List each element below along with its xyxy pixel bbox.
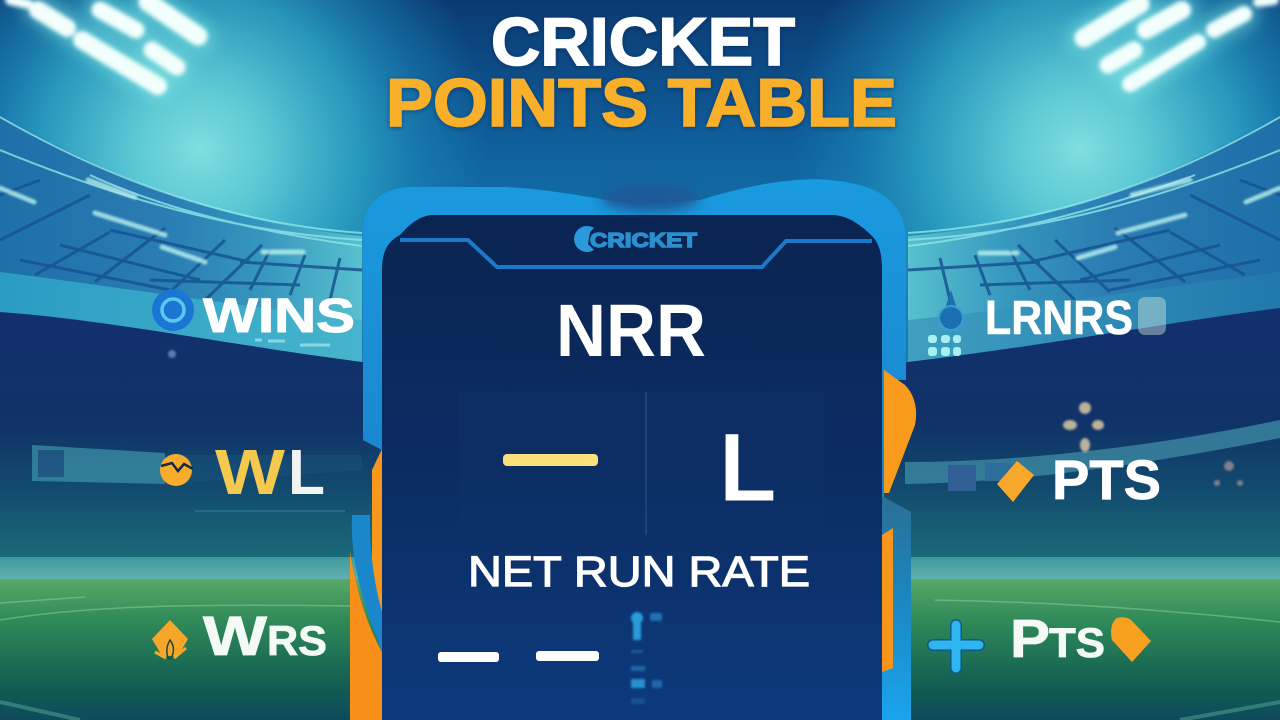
label: lrnrs: [928, 290, 1166, 356]
right scoreboard strip: [905, 420, 1280, 491]
green pitch: [0, 579, 1280, 720]
left floodlight: [10, 0, 200, 86]
dash left: [438, 652, 499, 662]
label: pts: [997, 448, 1161, 511]
letter L: L: [719, 417, 775, 519]
brand logo: [574, 226, 697, 252]
label: lrnrs: LRNRS: [985, 292, 1133, 345]
label: pts with plus: TS: [1049, 619, 1105, 666]
phone top shadow: [600, 184, 700, 212]
dash right: [536, 651, 599, 661]
left upper stand: [0, 115, 362, 362]
seat lights: [255, 340, 330, 345]
orange accent right lower: [882, 528, 893, 672]
small data marks: [631, 612, 662, 704]
label: wrs: [152, 604, 327, 667]
pitch boundary band: [0, 557, 1280, 580]
label: wrs: W: [203, 604, 267, 667]
label: wrs: RS: [267, 617, 327, 664]
orange accent left upper: [372, 449, 382, 612]
label: wl: W: [215, 436, 286, 508]
title line: points table: POINTS TABLE: [386, 65, 897, 141]
icon: blue plus: [933, 625, 979, 668]
dark lower stands: [0, 308, 1280, 558]
wins dash: [503, 454, 598, 466]
icon: orange diamond with leaves: [152, 620, 188, 659]
phone case: [363, 179, 906, 500]
lower right case: [882, 496, 911, 720]
blue stripe left: [352, 515, 382, 652]
label: wins: [152, 289, 355, 343]
stat grid: [459, 392, 824, 535]
title: [386, 4, 897, 141]
label: pts with plus: [933, 609, 1151, 669]
label: wl: L: [288, 436, 325, 508]
brand logo: CRICKET: [590, 230, 697, 252]
icon: orange diamond: [997, 461, 1034, 502]
orange accent left lower: [350, 552, 382, 720]
label: pts with plus: P: [1010, 609, 1050, 669]
icon: orange tag: [1111, 617, 1151, 662]
faded block: [1138, 297, 1166, 335]
left scoreboard strip: [32, 445, 362, 511]
icon: blue badge and dots: [928, 290, 963, 356]
heading: NRR: NRR: [556, 289, 706, 372]
distant lights: [168, 350, 1243, 486]
phone screen: [382, 215, 882, 720]
right upper stand: [908, 115, 1280, 362]
notch line: [400, 240, 872, 267]
label: wl: [160, 436, 325, 508]
icon: ring: [152, 289, 194, 331]
orange accent right upper: [884, 370, 916, 493]
phone scoreboard: [350, 179, 916, 720]
label: wins: WINS: [203, 290, 355, 343]
label: net run rate: NET RUN RATE: [468, 548, 810, 596]
right floodlight: [1082, 0, 1274, 84]
crowd light cross: [1063, 402, 1104, 452]
icon: orange ball: [160, 454, 193, 486]
label: pts: PTS: [1052, 448, 1161, 511]
title line: cricket: CRICKET: [491, 4, 795, 80]
